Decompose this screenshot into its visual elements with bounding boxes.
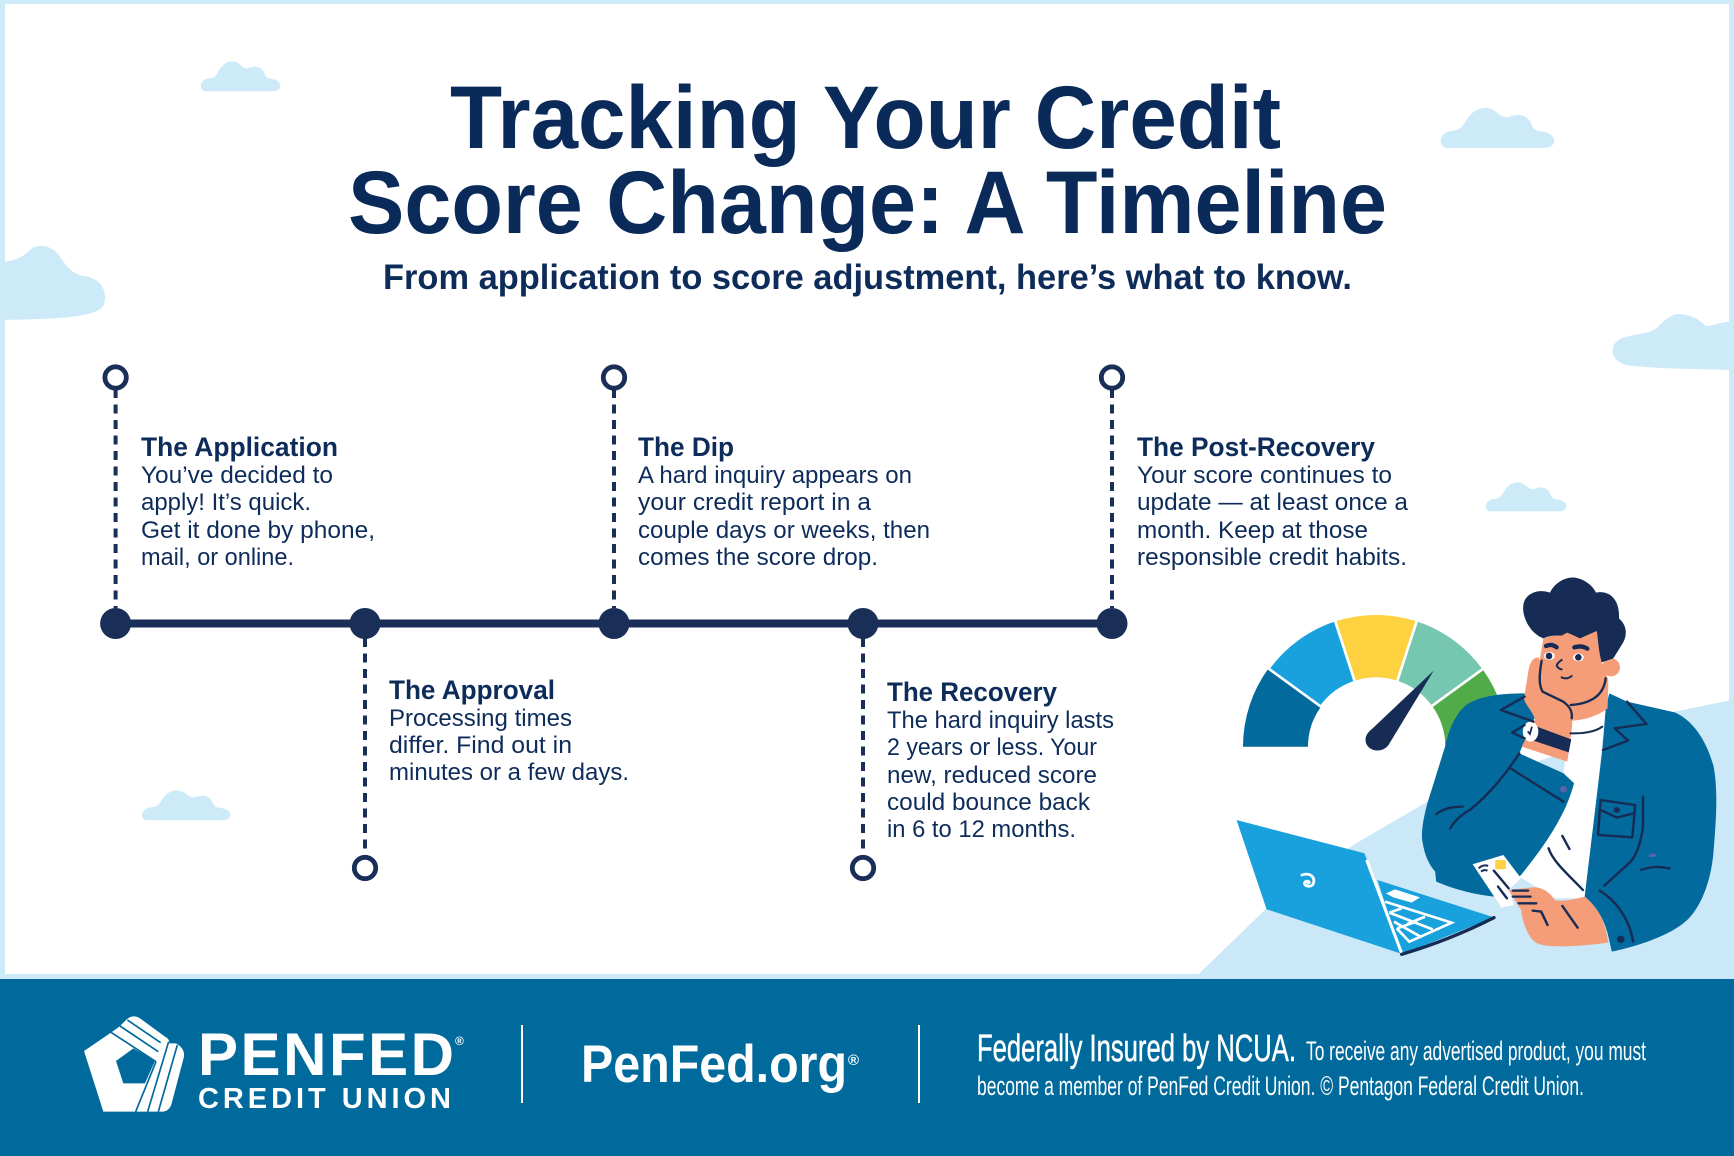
text block: The Approval: The Approval xyxy=(389,675,555,705)
laptop lid xyxy=(1237,820,1402,954)
cloud: left edge xyxy=(0,246,105,320)
disclosure xyxy=(977,1028,1646,1101)
credit card xyxy=(1473,855,1521,908)
jacket left side and sleeve xyxy=(1422,693,1574,897)
logo wordmark: ® xyxy=(455,1034,464,1048)
text block: The Approval xyxy=(389,675,629,786)
text block: The Recovery: The hard inquiry lasts xyxy=(887,707,1114,734)
timeline axis xyxy=(116,620,1112,628)
cloud: lower left xyxy=(142,790,230,820)
step 3 marker xyxy=(598,367,630,639)
text block: The Dip: couple days or weeks, then xyxy=(638,517,930,544)
title: Score Change: A Timeline xyxy=(348,152,1387,252)
t-shirt xyxy=(1519,707,1606,898)
gauge segment: good xyxy=(1335,614,1417,682)
footer band xyxy=(0,979,1734,1156)
website: ® xyxy=(848,1052,859,1069)
text block: The Post-Recovery: update — at least once a xyxy=(1137,489,1408,516)
jacket buttons xyxy=(1560,786,1656,943)
text block: The Application xyxy=(141,432,375,571)
face and neck xyxy=(1540,631,1608,721)
text block: The Post-Recovery: month. Keep at those xyxy=(1137,517,1368,544)
step 4 marker xyxy=(848,608,878,879)
cloud: top left xyxy=(201,61,280,91)
text block: The Application: apply! It’s quick. xyxy=(141,489,311,516)
step 1 marker xyxy=(100,367,131,639)
text block: The Application: mail, or online. xyxy=(141,544,294,571)
logo wordmark xyxy=(198,1021,464,1115)
subtitle: From application to score adjustment, here’s what to know. xyxy=(383,258,1352,297)
disclosure: Federally Insured by NCUA. xyxy=(977,1028,1296,1070)
text block: The Approval: Processing times xyxy=(389,705,572,732)
ear xyxy=(1602,658,1620,676)
text block: The Approval: differ. Find out in xyxy=(389,732,572,759)
gauge segment: poor xyxy=(1243,668,1321,747)
logo wordmark: CREDIT UNION xyxy=(198,1083,451,1115)
illustration: head xyxy=(1522,577,1626,762)
timeline xyxy=(100,367,1128,879)
text block: The Recovery: The Recovery xyxy=(887,677,1057,707)
logo wordmark: PENFED xyxy=(198,1021,454,1088)
text block: The Dip: The Dip xyxy=(638,432,734,462)
gauge needle xyxy=(1366,671,1434,750)
text block: The Approval: minutes or a few days. xyxy=(389,759,629,786)
text block: The Post-Recovery: The Post-Recovery xyxy=(1137,432,1375,462)
wristwatch xyxy=(1523,722,1571,752)
gauge segment: excellent xyxy=(1431,668,1509,747)
hair xyxy=(1523,577,1626,662)
facial features xyxy=(1540,645,1606,718)
credit score gauge xyxy=(1243,614,1509,747)
laptop base and keyboard xyxy=(1367,860,1494,954)
divider xyxy=(521,1025,523,1103)
gauge segment: very good xyxy=(1397,620,1484,707)
hand on cheek xyxy=(1522,657,1573,762)
jacket right side xyxy=(1585,693,1716,952)
logo mark xyxy=(84,1016,184,1112)
text block: The Recovery: new, reduced score xyxy=(887,762,1097,789)
text block: The Recovery xyxy=(887,677,1114,843)
text block: The Dip: comes the score drop. xyxy=(638,544,878,571)
text block: The Application: You’ve decided to xyxy=(141,462,333,489)
step 2 marker xyxy=(350,608,380,879)
divider xyxy=(918,1025,920,1103)
hill background xyxy=(1180,700,1734,980)
text block: The Application: The Application xyxy=(141,432,338,462)
title xyxy=(348,67,1387,252)
text block: The Post-Recovery: Your score continues to xyxy=(1137,462,1392,489)
cloud: middle right xyxy=(1486,482,1566,511)
title: Tracking Your Credit xyxy=(450,67,1281,167)
gauge segment: fair xyxy=(1268,620,1355,707)
cloud: right edge xyxy=(1613,314,1734,370)
hand holding card xyxy=(1509,887,1608,946)
text block: The Recovery: in 6 to 12 months. xyxy=(887,816,1076,843)
website: PenFed.org xyxy=(581,1035,847,1094)
jacket details xyxy=(1436,697,1669,942)
text block: The Post-Recovery: responsible credit habits. xyxy=(1137,544,1407,571)
collar line xyxy=(1571,727,1602,733)
finger lines xyxy=(1513,891,1578,928)
text block: The Dip: your credit report in a xyxy=(638,489,871,516)
text block: The Dip xyxy=(638,432,930,571)
cloud: top right xyxy=(1441,108,1554,148)
step 5 marker xyxy=(1096,367,1128,639)
text block: The Post-Recovery xyxy=(1137,432,1408,571)
text block: The Recovery: could bounce back xyxy=(887,789,1091,816)
text block: The Recovery: 2 years or less. Your xyxy=(887,734,1097,761)
text block: The Dip: A hard inquiry appears on xyxy=(638,462,912,489)
illustration: jacket details, card and laptop lid xyxy=(1237,697,1669,954)
text block: The Application: Get it done by phone, xyxy=(141,517,375,544)
illustration: needle and jacket xyxy=(1366,671,1716,952)
